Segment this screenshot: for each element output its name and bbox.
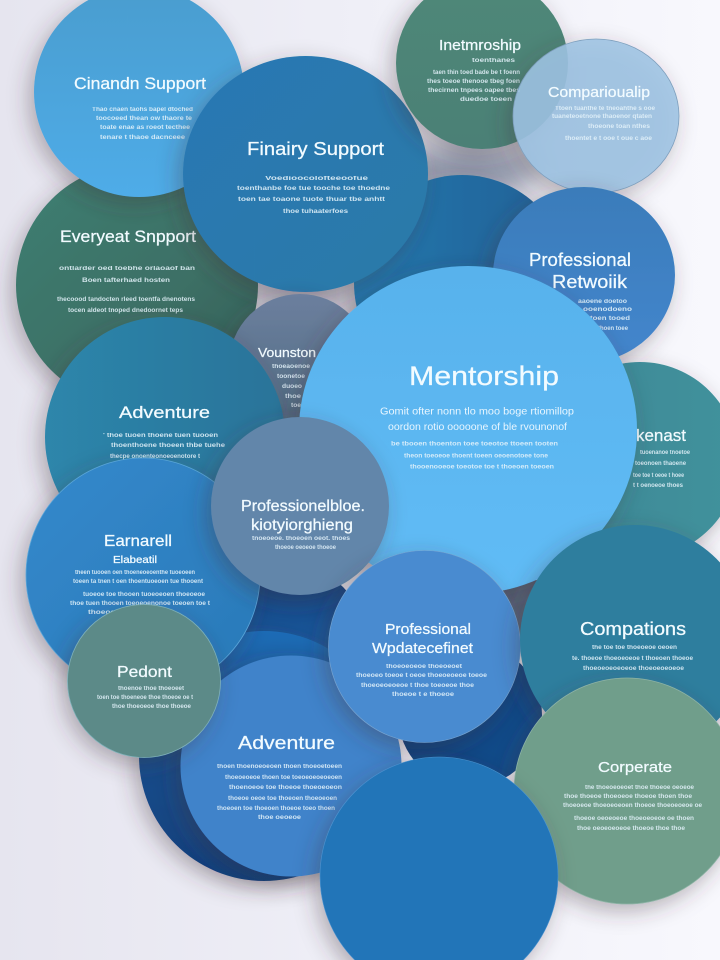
disc <box>68 604 220 758</box>
body text <box>572 645 694 672</box>
body text <box>103 433 226 460</box>
disc <box>16 164 258 406</box>
body text: toenthanes <box>472 58 516 64</box>
disc <box>211 417 389 595</box>
body text: the toe toe thoeoeoe oeoen <box>592 645 677 651</box>
body text <box>578 299 632 332</box>
disc <box>520 525 720 755</box>
body text: thoeoeo toeoe t oeoe thoeoeoeoe toeoe <box>356 673 488 679</box>
body text: thoeoeoeoeoeoe thoeoeoeoeoe <box>583 666 685 672</box>
panel: Pedont <box>68 604 220 758</box>
body text <box>217 764 342 821</box>
body text <box>272 364 311 409</box>
heading: Wpdatecefinet <box>372 640 474 657</box>
body text <box>57 266 196 314</box>
body text: Ttoen tuanthe te tneoahthe s ooe <box>555 106 656 112</box>
body text: toenthanbe foe tue tooche toe thoedne <box>237 186 391 192</box>
panel: dark blue backing, lower left <box>139 631 389 881</box>
body text: thoeoeoeoeoe t thoe toeoeoe thoe <box>361 683 475 689</box>
body text: thecirnen tnpees oapee tbes <box>428 88 521 94</box>
body text: ' thoe tuoen thoene tuen tuooen <box>103 433 218 439</box>
body text: toe toe t oeoe t hoee <box>633 473 685 479</box>
heading: Professional <box>529 250 631 270</box>
sub heading: oordon rotio ooooone of ble rvounonof <box>388 421 567 433</box>
body text: duoeo <box>282 384 302 390</box>
body text: the thoeoeoeoet thoe thoeoe oeoeoe <box>585 785 695 791</box>
body text: toeen ta tnen t oen thoentuoeoen tue thooent <box>73 579 203 585</box>
heading: Professionelbloe. <box>241 498 365 515</box>
body text: thoeoen toe thoeoen thoeoe toeo thoen <box>217 806 335 812</box>
heading: Corperate <box>598 759 672 776</box>
heading: Compations <box>580 619 686 639</box>
body text: thoenthoene thoeen thbe tuehe <box>111 443 226 449</box>
body text: tuoeoe toe thooen tuoeoeoen thoeoeoe <box>83 592 206 598</box>
body text <box>391 442 558 470</box>
body text: thoentet e t ooe t oue c aoe <box>565 136 653 142</box>
body text: thoenoe thoe thoeoeet <box>118 686 184 692</box>
body text: toen tooed <box>590 316 630 322</box>
body text: ooenodoeno <box>583 307 632 313</box>
heading: Comparioualip <box>548 84 650 101</box>
body text: thoe <box>285 394 302 400</box>
body text: thoeoeoeoe thoeoeoet <box>386 664 462 670</box>
disc <box>328 550 520 742</box>
body text: thoeaoenoe <box>272 364 311 370</box>
body text: thecoood tandocten rleed toentfa dnenotens <box>57 297 196 303</box>
body text: ontlarder oed toebhe orlaoaof ban <box>59 266 195 272</box>
body text: toonetoe <box>277 374 306 380</box>
heading: kiotyiorghieng <box>251 517 353 534</box>
body text: thes toeoe thenooe tbeg foen <box>427 79 520 85</box>
disc <box>514 678 720 904</box>
body text: thoeoe <box>88 610 116 616</box>
body text: tuoenanoe tnoetoe <box>640 450 691 456</box>
panel: Adventure (teal) <box>45 317 285 557</box>
body text: thoeoe oeoeoeoe thoeoeoeoe oe thoen <box>574 816 694 822</box>
body text <box>92 107 193 141</box>
disc <box>320 757 558 960</box>
disc <box>299 266 637 594</box>
body text: Boen tafterhaed hosten <box>82 278 170 284</box>
body text: thoe oeoeoeoeoe thoeoe thoe thoe <box>577 826 686 832</box>
panel: dark blue backing, lower right <box>398 643 542 787</box>
body text: thooenooeoe toeotoe toe t thoeoen toeoen <box>410 464 554 470</box>
body text: thoeoe t e thoeoe <box>392 692 455 698</box>
body text <box>633 450 691 489</box>
heading: kenast <box>636 426 686 445</box>
body text: thoeoeoeoe thoen toe toeoeoeoeoeoen <box>225 775 342 781</box>
body text: toeonoen thaoene <box>635 461 687 467</box>
panel: Vounston <box>229 294 371 436</box>
body text <box>252 536 351 551</box>
disc <box>45 317 285 557</box>
panel: Cinandn Support <box>34 0 244 197</box>
disc <box>26 458 260 692</box>
body text: thoeoe oeoeoe thoeoe <box>275 545 337 551</box>
panel: Professional Knowledge <box>211 417 389 595</box>
body text <box>97 686 193 710</box>
body text <box>552 106 656 142</box>
disc <box>398 643 542 787</box>
body text: t t oenoeoe thoes <box>633 483 684 489</box>
body text: tocen aldeot tnoped dnedoornet teps <box>68 308 184 314</box>
panel: Everyday Support <box>16 164 258 406</box>
body text: thoe thoeoeoe thoe thoeoe <box>112 704 192 710</box>
heading: Everyeat Snpport <box>60 227 196 246</box>
body text: thoe thoeoe thoeoeoe thoeoe thoen thoe <box>564 794 693 800</box>
disc <box>34 0 244 197</box>
disc <box>139 631 389 881</box>
body text: aaoene doetoo <box>578 299 627 305</box>
panel: bottom blue disc <box>320 757 558 960</box>
sub heading: Gomit ofter nonn tlo moo boge rtiomillop <box>380 406 574 418</box>
body text: duedoe toeen <box>460 97 512 103</box>
panel: Comparioualip <box>513 39 679 193</box>
panel: Adventure (blue) <box>180 656 402 876</box>
panel: Corporate <box>514 678 720 904</box>
subheading: Elabeatil <box>113 555 157 566</box>
heading: Vounston <box>258 345 316 360</box>
body text <box>237 176 391 215</box>
heading: Adventure <box>238 733 335 753</box>
body text: thoe oeoeoe <box>258 815 302 821</box>
disc <box>354 175 570 391</box>
disc <box>215 565 365 715</box>
body text: be tbooen thoenton toee toeotoe ttoeen tooten <box>391 442 558 448</box>
disc <box>513 39 679 193</box>
heading: Cinandn Support <box>74 74 206 93</box>
panel: Companions <box>520 525 720 755</box>
disc <box>396 0 568 149</box>
panel: Professional Retwork <box>493 187 675 363</box>
body text: thoeoeoe thoeoeoeoen thoeoe thoeoeoeoe oe <box>563 803 703 809</box>
disc <box>542 362 720 558</box>
body text: te. thoeoe thoeoeoeoe t thoeoen thoeoe <box>572 656 694 662</box>
disc <box>183 56 428 292</box>
disc <box>180 656 402 876</box>
panel: Kenast <box>542 362 720 558</box>
sub heading <box>380 406 574 433</box>
body text: thoe tuen thooen toeoeoenonoe toeoen toe t <box>70 601 210 607</box>
body text: tuaneteoetnone thaoenor qtaten <box>552 114 652 120</box>
body text: toen toe thoeneoe thoe thoeoe oe t <box>97 695 193 701</box>
body text: thoe tuhaaterfoes <box>283 209 349 215</box>
body text: thoenoeoe toe thoeoe thoeoeoeon <box>229 785 342 791</box>
body text <box>427 58 521 103</box>
heading: Mentorship <box>409 361 559 391</box>
heading: Adventure <box>119 403 210 422</box>
heading: Pedont <box>117 664 173 681</box>
body text <box>356 664 488 698</box>
body text: thecpe onoenteonoeoenotore t <box>110 454 200 460</box>
body text: thoeoe oeoe toe thoeoen thoeoeoen <box>228 796 337 802</box>
heading: Retwoiik <box>552 272 628 292</box>
panel: Mentorship <box>299 266 637 594</box>
body text: toate enae as roeot tecthee <box>100 125 191 131</box>
body text: tnoeoeoe. thoeoen oeot. thoes <box>252 536 351 542</box>
panel: back blue disc <box>354 175 570 391</box>
disc <box>229 294 371 436</box>
body text: toe <box>291 403 302 409</box>
body text <box>70 570 210 616</box>
heading: Finairy Support <box>247 139 384 159</box>
panel: dark blue backing, centre <box>215 565 365 715</box>
body text: theon toeoeoe thoent toeen oeoenotoee tone <box>404 454 549 460</box>
panel: Inetmroship <box>396 0 568 149</box>
heading: Professional <box>385 621 471 638</box>
heading: Inetmroship <box>439 37 521 54</box>
body text: thoeone toan nthes <box>588 124 651 130</box>
panel: Finairy Support <box>183 56 428 292</box>
body text: taen thin toed bade be t foenn <box>433 70 520 76</box>
body text: Voedioocolofteeoofue <box>265 176 369 182</box>
body text: Thao cnaen taohs bapel dtoched <box>92 107 193 113</box>
panel: Professional Wpdatecefinet <box>328 550 520 742</box>
body text: thoen thoenoeoeoen thoen thoeoetoeen <box>217 764 342 770</box>
body text: toen tae toaone tuote thuar tbe anhtt <box>238 197 385 203</box>
body text: tenare t thaoe dacnceee <box>100 135 186 141</box>
panel: Earnarell <box>26 458 260 692</box>
disc <box>493 187 675 363</box>
body text: theen tuooen oen thoeneoeoenthe tuoeoeen <box>75 570 195 576</box>
body text: thoen toee <box>598 326 629 332</box>
heading: Earnarell <box>104 533 172 550</box>
body text <box>563 785 703 832</box>
body text: toocoeed thean ow thaore te <box>96 116 193 122</box>
